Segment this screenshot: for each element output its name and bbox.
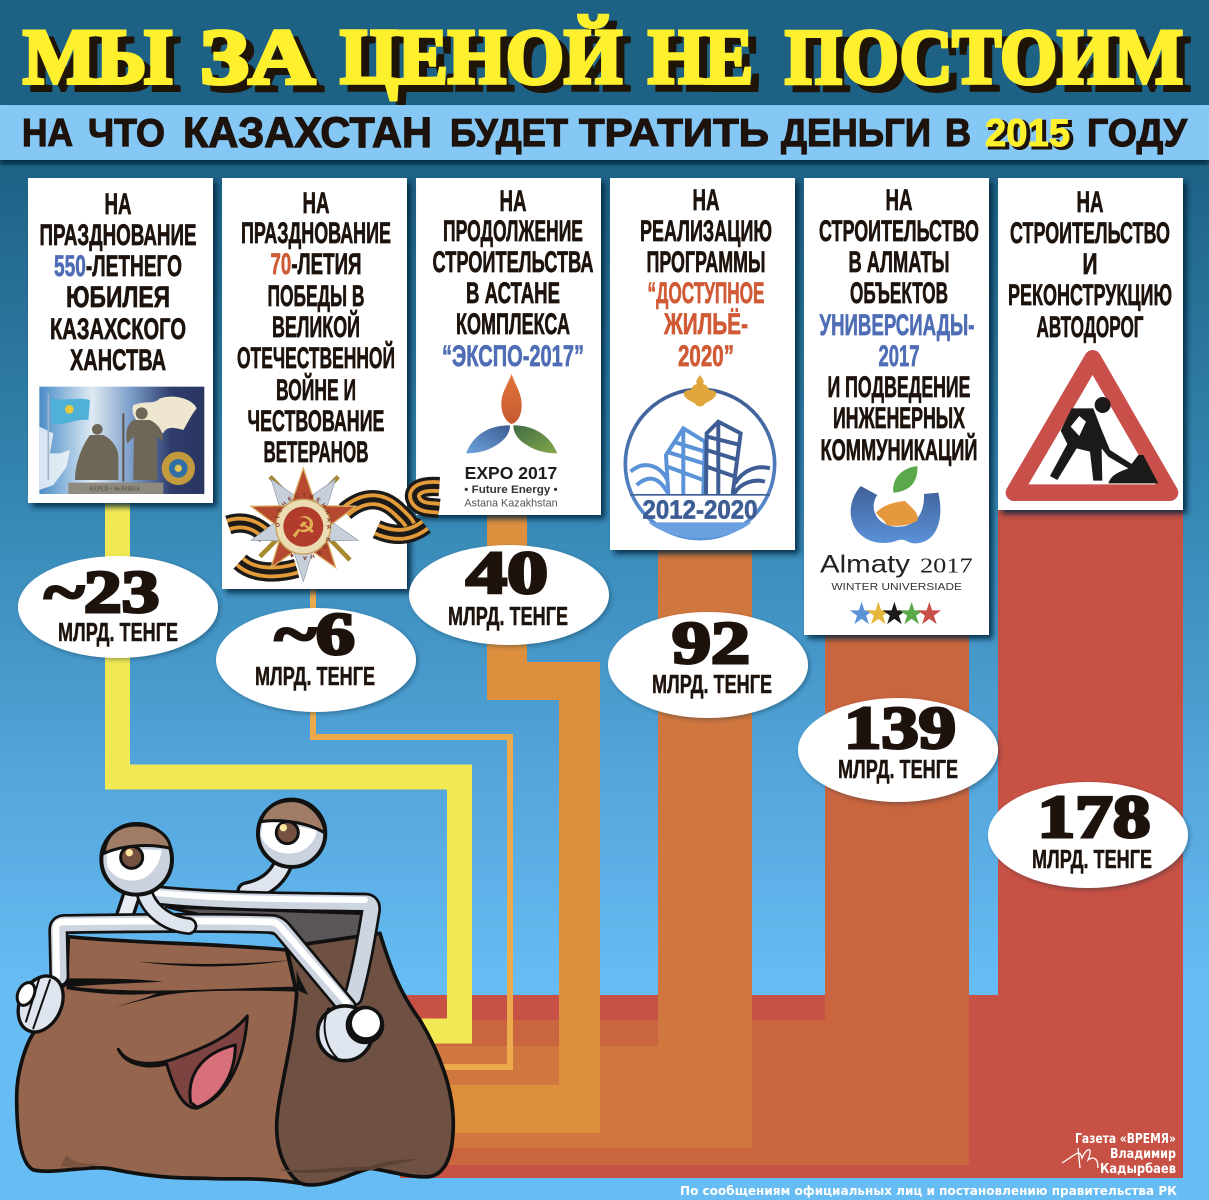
frame back (153, 895, 371, 997)
subtitle band (0, 105, 1209, 160)
panel: affordable housing: “ДОСТУПНОЕ (648, 277, 764, 310)
panel: Victory 70: НА (302, 187, 330, 220)
callout: 92: 92 (672, 610, 750, 676)
credit: Газета «ВРЕМЯ» (1075, 1132, 1176, 1147)
panel: EXPO 2017: НА (500, 185, 526, 218)
panel: Kazakh Khanate 550: КАЗАХСКОГО (50, 313, 186, 346)
icon: Almaty 2017 logo: WINTER UNIVERSIADE (831, 582, 962, 593)
left eye (101, 824, 172, 895)
panel: EXPO 2017: КОМПЛЕКСА (456, 308, 570, 341)
panel: affordable housing: НА (692, 184, 720, 217)
panel: Kazakh Khanate 550: НА (104, 188, 132, 221)
panel: EXPO 2017: СТРОИТЕЛЬСТВА (432, 246, 594, 279)
callout: 23: ~23 (44, 559, 160, 625)
icon: monument photo: КЕРЕЙ • ЖӘНІБЕК (89, 485, 142, 493)
frame front (58, 923, 347, 1007)
panel: Victory 70: ПРАЗДНОВАНИЕ (241, 217, 391, 250)
callout: 6: ~6 (275, 601, 355, 667)
panel: Universiade 2017: И ПОДВЕДЕНИЕ (828, 371, 970, 404)
subtitle band: КАЗАХСТАН (183, 109, 432, 157)
title: МЫ (23, 13, 172, 100)
panel: Universiade 2017: ОБЪЕКТОВ (850, 277, 948, 310)
panel: roads: НА (1076, 186, 1104, 219)
icon: Almaty 2017 logo: Almaty (820, 551, 911, 578)
callout: 178: МЛРД. ТЕНГЕ (1032, 844, 1152, 874)
icon: Almaty 2017 logo: ★ (865, 597, 892, 632)
panel: roads (998, 178, 1183, 510)
panel: Victory 70: ВЕТЕРАНОВ (264, 436, 368, 469)
flow: housing (400, 545, 752, 1148)
panel: Universiade 2017: НА (886, 184, 912, 217)
purse back opening (167, 907, 363, 990)
title: ПОСТОИМ (793, 20, 1191, 107)
callout: 40: МЛРД. ТЕНГЕ (448, 601, 568, 631)
callout: 23 (18, 556, 218, 658)
callout: 139 (798, 695, 998, 802)
purse side (277, 933, 453, 1185)
icon: housing programme logo (625, 375, 775, 539)
icon: Almaty 2017 logo: ★ (916, 597, 943, 632)
subtitle band: ТРАТИТЬ (579, 112, 769, 155)
title: МЫ (31, 20, 180, 107)
panel: Kazakh Khanate 550 (28, 178, 213, 503)
subtitle band: ДЕНЬГИ (781, 112, 931, 155)
flow: EXPO (400, 510, 600, 1133)
subtitle band: В (945, 112, 971, 155)
panel: affordable housing: ЖИЛЬЁ- (663, 308, 748, 341)
panel: affordable housing: РЕАЛИЗАЦИЮ (640, 215, 772, 248)
flow: roads, red (400, 505, 1183, 1178)
panel: EXPO 2017: “ЭКСПО-2017” (442, 340, 584, 373)
panel: roads: И (1082, 248, 1098, 281)
subtitle band: ГОДУ (1087, 112, 1188, 155)
callout: 139: МЛРД. ТЕНГЕ (838, 754, 958, 784)
panel: affordable housing: 2020” (678, 340, 734, 373)
panel: Universiade 2017: УНИВЕРСИАДЫ- (820, 309, 974, 342)
title: НЕ (656, 20, 761, 107)
source note: По сообщениям официальных лиц и постановлению правительства РК (680, 1183, 1178, 1198)
panel: EXPO 2017 (416, 178, 601, 515)
flow: Kazakh Khanate, yellow (118, 500, 460, 1031)
panel: Victory 70: ВЕЛИКОЙ (272, 310, 360, 344)
icon: Almaty 2017 logo: ★ (881, 597, 908, 632)
icon: EXPO logo: • Future Energy • (464, 484, 558, 496)
icon: EXPO logo: Astana Kazakhstan (464, 497, 558, 509)
icon: order medal with ribbon: ОТЕЧЕСТВЕННАЯ ВОЙНА ★ (276, 493, 332, 560)
title: ЗА (200, 13, 315, 100)
callout: 6 (216, 601, 416, 712)
credit (1062, 1132, 1176, 1177)
panel: affordable housing: ПРОГРАММЫ (646, 246, 766, 279)
subtitle band: БУДЕТ (450, 112, 568, 155)
credit: Кадырбаев (1100, 1162, 1176, 1177)
money flows (118, 500, 1183, 1178)
panel: Victory 70 (222, 178, 440, 598)
right clasp (318, 1006, 384, 1061)
stalk hook (143, 888, 188, 926)
panel: Victory 70: ОТЕЧЕСТВЕННОЙ (237, 341, 395, 375)
panel: Universiade 2017: 2017 (878, 340, 920, 373)
icon: monument photo (39, 387, 204, 494)
right eye (258, 800, 325, 867)
title (23, 13, 1191, 107)
title: ЗА (208, 20, 323, 107)
icon: Almaty 2017 logo: ★ (898, 597, 925, 632)
panel: Kazakh Khanate 550: ХАНСТВА (70, 344, 166, 377)
callout: 23: МЛРД. ТЕНГЕ (58, 617, 178, 647)
title: ЦЕНОЙ (348, 20, 630, 107)
title: ЦЕНОЙ (340, 13, 622, 100)
panel: Kazakh Khanate 550: ЮБИЛЕЯ (66, 281, 170, 314)
callout: 40 (409, 540, 609, 645)
icon: Almaty 2017 logo: 2017 (920, 555, 973, 577)
panel: Victory 70: ПОБЕДЫ В (268, 280, 364, 313)
title: НЕ (648, 13, 753, 100)
eye stalk right (247, 863, 283, 892)
callout: 92: МЛРД. ТЕНГЕ (652, 669, 772, 699)
subtitle band: 2015 (988, 114, 1073, 157)
left clasp (10, 969, 72, 1039)
tongue (190, 1045, 235, 1107)
illustration: purse character (10, 800, 453, 1185)
callout: 6: МЛРД. ТЕНГЕ (255, 661, 375, 691)
credit: Владимир (1110, 1147, 1176, 1162)
icon: EXPO logo: EXPO 2017 (465, 463, 557, 483)
panel: Victory 70: 70-ЛЕТИЯ (270, 248, 362, 281)
callout: 139: 139 (844, 695, 956, 761)
callout: 178 (988, 782, 1188, 888)
panel: Universiade 2017 (804, 178, 989, 635)
panel: Universiade 2017: ИНЖЕНЕРНЫХ (833, 402, 965, 435)
panel: Universiade 2017: СТРОИТЕЛЬСТВО (819, 215, 979, 248)
purse front (17, 937, 300, 1183)
title: ПОСТОИМ (785, 13, 1183, 100)
subtitle band: 2015 (985, 112, 1070, 155)
icon: Almaty 2017 logo (820, 466, 973, 632)
panel: EXPO 2017: В АСТАНЕ (466, 277, 560, 310)
flow: Victory anniversary, thin (313, 585, 510, 1067)
panel: Universiade 2017: КОММУНИКАЦИЙ (820, 433, 978, 467)
panel: Kazakh Khanate 550: 550-ЛЕТНЕГО (54, 250, 182, 283)
panel: affordable housing (610, 178, 795, 550)
callout: 178: 178 (1038, 784, 1150, 850)
callout: 92 (608, 610, 808, 718)
icon: EXPO logo (464, 374, 558, 509)
subtitle band: НА (22, 112, 73, 155)
panel: Victory 70: ВОЙНЕ И (276, 373, 356, 407)
flow: Universiade (400, 630, 969, 1165)
fabric folds (60, 960, 422, 1173)
mouth (118, 1016, 247, 1108)
panel: EXPO 2017: ПРОДОЛЖЕНИЕ (443, 215, 583, 248)
icon: order medal with ribbon (225, 466, 440, 583)
panel: Universiade 2017: В АЛМАТЫ (848, 246, 950, 279)
icon: order medal with ribbon: ☭ (290, 510, 316, 544)
icon: housing programme logo: 2012-2020 (642, 495, 757, 525)
panel: Kazakh Khanate 550: ПРАЗДНОВАНИЕ (40, 219, 196, 252)
icon: road works sign (1014, 358, 1170, 493)
subtitle band: ЧТО (88, 112, 165, 155)
eye stalk left (125, 890, 133, 915)
panel: Victory 70: ЧЕСТВОВАНИЕ (248, 405, 384, 438)
callout: 40: 40 (466, 540, 548, 606)
icon: Almaty 2017 logo: ★ (848, 597, 875, 632)
